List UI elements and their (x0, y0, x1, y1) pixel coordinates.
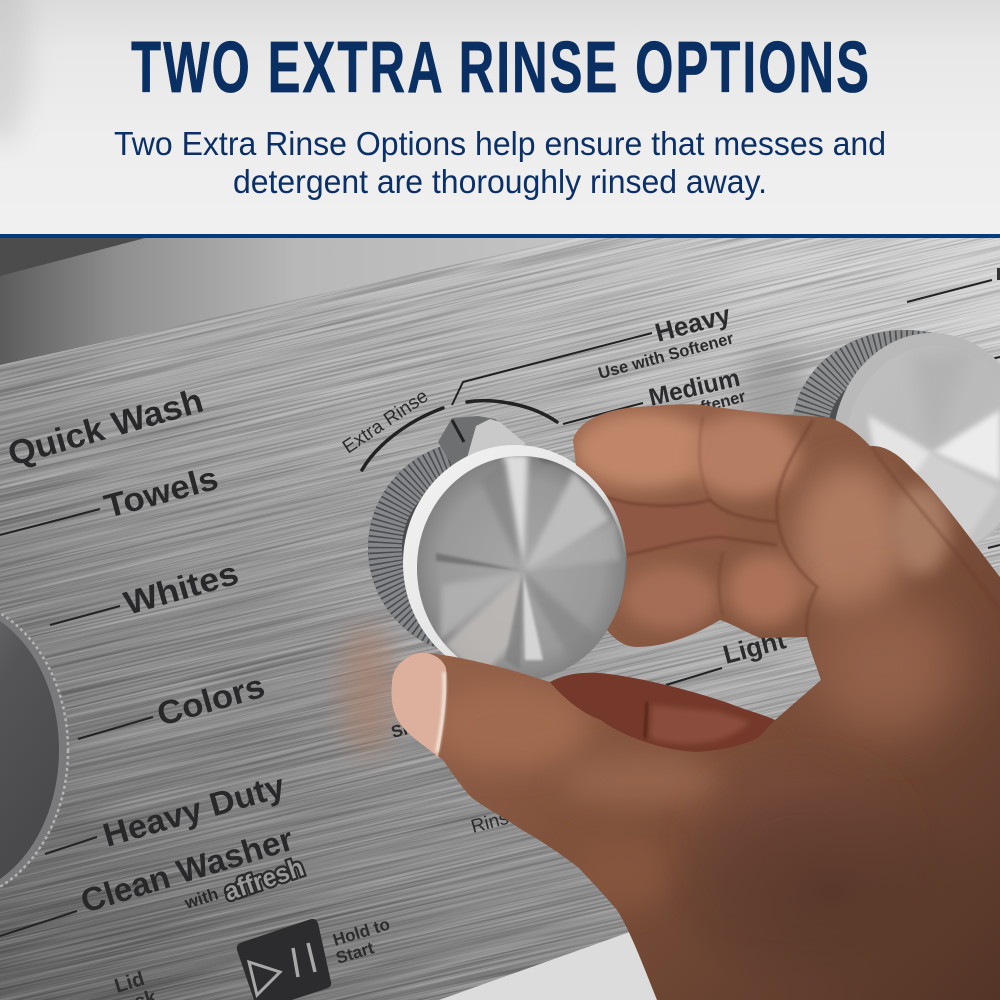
chrome ring (403, 445, 627, 681)
left cycle labels: Quick Wash (4, 382, 207, 474)
thumbnail (391, 653, 446, 757)
left cycle labels: with (181, 884, 221, 913)
center dial (368, 416, 627, 681)
left cycle labels: Whites (120, 554, 242, 622)
skin shading (442, 406, 974, 942)
soil level labels: Extra Rinse (339, 386, 432, 458)
left cycle labels (4, 382, 307, 920)
left cycle labels: Colors (153, 667, 269, 733)
soil level labels: Heavy (652, 299, 734, 348)
subtitle: detergent are thoroughly rinsed away. (233, 163, 767, 200)
knob radial reflections (436, 455, 620, 680)
right dial (792, 330, 1000, 557)
left cycle labels: Clean Washer (76, 820, 298, 920)
finger creases (606, 418, 956, 640)
palm-side finger in shadow (550, 673, 775, 752)
knurled rim (368, 440, 588, 656)
blue divider (0, 234, 1000, 238)
left cycle labels: Towels (100, 459, 222, 525)
start button: Start (334, 938, 377, 968)
knob face (417, 456, 625, 680)
soil level labels: Use with Softener (596, 329, 736, 383)
soil level labels: Single (389, 710, 443, 742)
cycle leader lines (0, 280, 1000, 936)
soil level labels: Medium (646, 365, 743, 412)
left dial (0, 598, 69, 902)
thumbnail pale edge (437, 672, 444, 752)
soil level labels (339, 299, 789, 838)
soil level labels: Light (720, 624, 789, 670)
subtitle (114, 125, 886, 200)
title: TWO EXTRA RINSE OPTIONS (131, 28, 869, 108)
soil level labels: Rinse (469, 805, 521, 838)
lid lock label: Lid (112, 968, 147, 998)
subtitle: Two Extra Rinse Options help ensure that messes and (114, 125, 886, 162)
hand (391, 404, 1000, 1000)
start button (237, 915, 392, 1000)
photo: washer body and brushed control panel (0, 238, 1000, 1000)
left cycle labels: affresh (220, 852, 307, 907)
pointer (438, 416, 526, 470)
partial label top right (997, 268, 1000, 280)
hand silhouette (392, 404, 1000, 1000)
lid lock label (108, 968, 160, 1000)
start button: Hold to (331, 915, 392, 950)
left cycle labels: Heavy Duty (99, 766, 289, 854)
header band (0, 0, 1000, 234)
soil level leader lines (362, 333, 722, 685)
soil level labels: Use with Softener (608, 387, 748, 441)
